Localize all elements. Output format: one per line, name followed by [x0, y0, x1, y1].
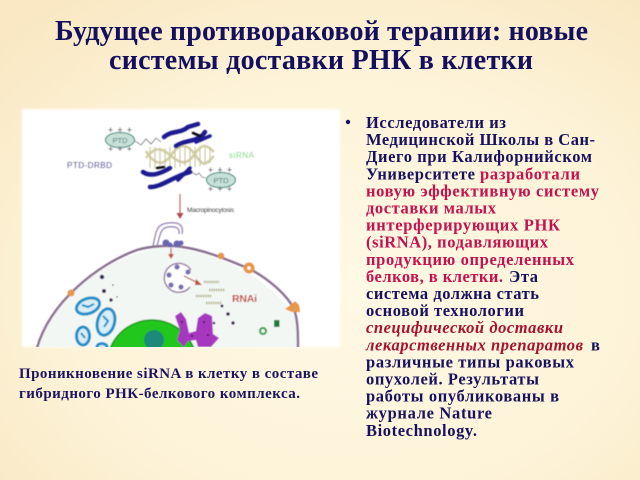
- bullet text block: Университете: [366, 164, 475, 183]
- PTD bottom: [192, 167, 237, 192]
- bullet: [346, 120, 350, 124]
- cell membrane: [37, 246, 298, 348]
- dark granules: [100, 275, 235, 325]
- caption: [19, 366, 318, 402]
- macropinocytosis vesicle: [153, 223, 184, 248]
- PTD top: + + +: [108, 125, 132, 135]
- green organelles: [260, 320, 280, 334]
- cell cytoplasm: [36, 246, 300, 350]
- bullet text block: в: [591, 335, 600, 354]
- PTD top: + + +: [108, 144, 132, 154]
- bullet text block: (siRNA), подавляющих: [366, 233, 549, 252]
- PTD top: [104, 127, 162, 152]
- endosome: [164, 263, 191, 292]
- title: [55, 16, 588, 76]
- bullet text block: Исследователи из: [366, 113, 506, 132]
- title: Будущее противораковой терапии: новые: [55, 16, 588, 47]
- PTD bottom: + + +: [208, 184, 232, 194]
- bullet text block: журнале Nature: [366, 404, 492, 423]
- title: системы доставки РНК в клетки: [109, 45, 533, 76]
- orange receptors: [68, 253, 300, 312]
- bullet text block: новую эффективную систему: [366, 181, 600, 200]
- caption: гибридного РНК-белкового комплекса.: [19, 386, 300, 402]
- bullet text block: лекарственных препаратов: [365, 335, 584, 354]
- protein domains: [143, 124, 210, 187]
- bullet text block: основой технологии: [366, 301, 524, 320]
- arrow: macropinocytosis: [176, 194, 184, 219]
- released siRNA: [196, 282, 225, 303]
- bullet text block: специфической доставки: [366, 318, 563, 337]
- PTD-DRBD label: PTD-DRBD: [67, 161, 112, 170]
- bullet text block: Эта: [509, 267, 538, 286]
- PTD bottom: + + +: [208, 165, 232, 175]
- bullet text block: разработали: [480, 164, 580, 183]
- nucleus: [109, 318, 195, 347]
- illustration: siRNA delivery into a cell: [21, 108, 341, 348]
- bullet text block: [346, 113, 600, 440]
- bullet text block: различные типы раковых: [366, 352, 575, 371]
- caption: Проникновение siRNA в клетку в составе: [19, 366, 318, 382]
- purple endoplasmic reticulum: [175, 312, 219, 347]
- PTD bottom: PTD: [214, 176, 229, 185]
- siRNA label: siRNA: [229, 151, 255, 160]
- RNAi label: RNAi: [232, 293, 257, 305]
- macropinocytosis label: Macropinocytosis: [187, 207, 235, 214]
- PTD top: PTD: [112, 136, 128, 145]
- bullet text block: система должна стать: [366, 284, 539, 303]
- bullet text block: Диего при Калифорнийском: [366, 147, 592, 166]
- bullet text block: белков, в клетки.: [366, 267, 503, 286]
- bullet text block: Медицинской Школы в Сан-: [366, 130, 595, 149]
- DNA / siRNA helix: [146, 146, 214, 169]
- bullet text block: интерферирующих РНК: [366, 216, 560, 235]
- arrows inside cell: [168, 248, 202, 285]
- mitochondria: [74, 295, 118, 350]
- bullet text block: опухолей. Результаты: [366, 370, 539, 388]
- bullet text block: доставки малых: [366, 198, 497, 218]
- bullet text block: Biotechnology.: [366, 421, 477, 440]
- bullet text block: продукцию определенных: [366, 250, 575, 269]
- bullet text block: работы опубликованы в: [366, 387, 559, 406]
